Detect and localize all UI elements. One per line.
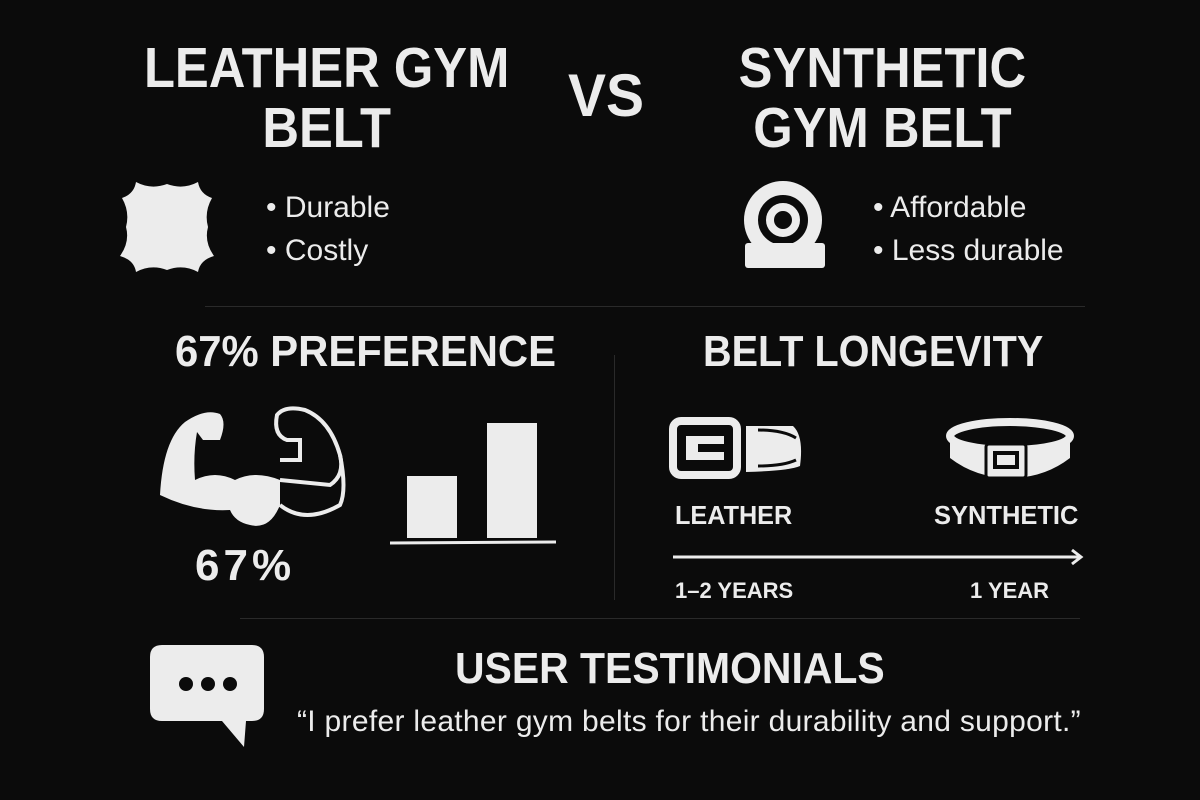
bar chart bbox=[390, 423, 556, 544]
title: leather gym belt: BELT bbox=[262, 96, 391, 160]
icon: flexed arms bbox=[160, 406, 346, 526]
text: leather bullets bbox=[266, 191, 390, 267]
title: vs: VS bbox=[568, 62, 644, 129]
heading: user testimonials: USER TESTIMONIALS bbox=[455, 644, 885, 693]
title: synthetic gym belt: GYM BELT bbox=[753, 96, 1012, 160]
text: synthetic bullets: • Less durable bbox=[873, 234, 1064, 267]
label: synthetic: SYNTHETIC bbox=[934, 500, 1078, 530]
label: leather: LEATHER bbox=[675, 500, 792, 530]
icon: leather hide bbox=[120, 182, 214, 272]
icon: synthetic belt bbox=[946, 418, 1074, 477]
text: synthetic bullets: • Affordable bbox=[873, 191, 1026, 224]
icon: speech bubble bbox=[150, 645, 264, 747]
heading: 67% preference: 67% PREFERENCE bbox=[175, 327, 556, 376]
text: leather bullets: • Durable bbox=[266, 191, 390, 224]
arrow: timeline bbox=[673, 548, 1084, 566]
icon: leather belt bbox=[669, 417, 802, 479]
text: 67%: 67% bbox=[195, 541, 295, 590]
icon: synthetic weight plate bbox=[744, 181, 825, 268]
title: synthetic gym belt bbox=[739, 36, 1026, 160]
label: 1 year: 1 YEAR bbox=[970, 578, 1049, 603]
label: 1-2 years: 1–2 YEARS bbox=[675, 578, 793, 603]
title: leather gym belt: LEATHER GYM bbox=[144, 36, 509, 100]
text: synthetic bullets bbox=[873, 191, 1064, 267]
text: testimonial quote: “I prefer leather gym belts for their durability and support.” bbox=[297, 705, 1081, 738]
text: leather bullets: • Costly bbox=[266, 234, 368, 267]
title: synthetic gym belt: SYNTHETIC bbox=[739, 36, 1026, 100]
heading: belt longevity: BELT LONGEVITY bbox=[703, 327, 1043, 376]
title: leather gym belt bbox=[144, 36, 509, 160]
